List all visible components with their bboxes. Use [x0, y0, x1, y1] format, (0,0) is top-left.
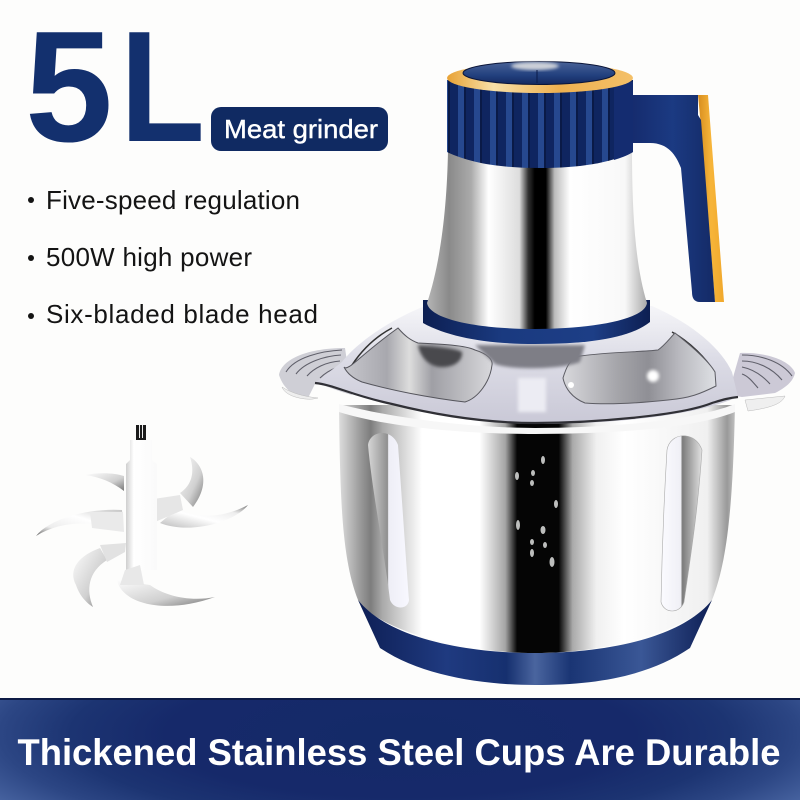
ribbed collar: [447, 80, 633, 168]
glass panel left: [344, 328, 492, 402]
blue base: [358, 600, 712, 685]
left slot: [368, 433, 409, 608]
feature list: [28, 185, 318, 329]
title: 5L capacity: L: [120, 0, 205, 175]
shadow under motor: [475, 345, 585, 368]
illustration: steel bowl: [339, 405, 735, 685]
gold ring: [447, 63, 633, 93]
lid flange: [315, 306, 738, 424]
right ear: [728, 353, 795, 397]
bowl body: [339, 405, 735, 653]
right slot: [661, 436, 702, 611]
footer banner: [0, 698, 800, 800]
glass panel right: [563, 333, 716, 404]
ear ridges: [286, 350, 792, 388]
footer banner: Thickened Stainless Steel Cups Are Durable: [18, 732, 780, 773]
badge: Meat grinder: Meat grinder: [224, 114, 378, 144]
handle gold strip: [698, 95, 724, 302]
illustration: lid with handles: [279, 306, 795, 434]
blue collar ring: [423, 300, 650, 344]
control dial: [463, 62, 615, 84]
ear tabs: [282, 387, 318, 399]
dome outline right: [672, 332, 715, 373]
feature list: Six-bladed blade head: [46, 299, 318, 329]
dark reflection left: [418, 345, 462, 367]
water droplets: [515, 456, 558, 567]
title: 5L capacity: [25, 0, 205, 175]
illustration: motor housing: [423, 62, 724, 344]
rim band: [339, 404, 735, 434]
illustration: six-blade head: [36, 425, 248, 607]
centre highlight: [518, 378, 546, 412]
handle: [630, 95, 715, 302]
dome outline left: [352, 328, 392, 365]
title: 5L capacity: 5: [25, 0, 113, 175]
badge: Meat grinder: [211, 107, 388, 151]
steel bell body: [427, 150, 647, 329]
feature list: 500W high power: [46, 242, 252, 272]
left ear: [279, 348, 352, 398]
feature list: Five-speed regulation: [46, 185, 300, 215]
